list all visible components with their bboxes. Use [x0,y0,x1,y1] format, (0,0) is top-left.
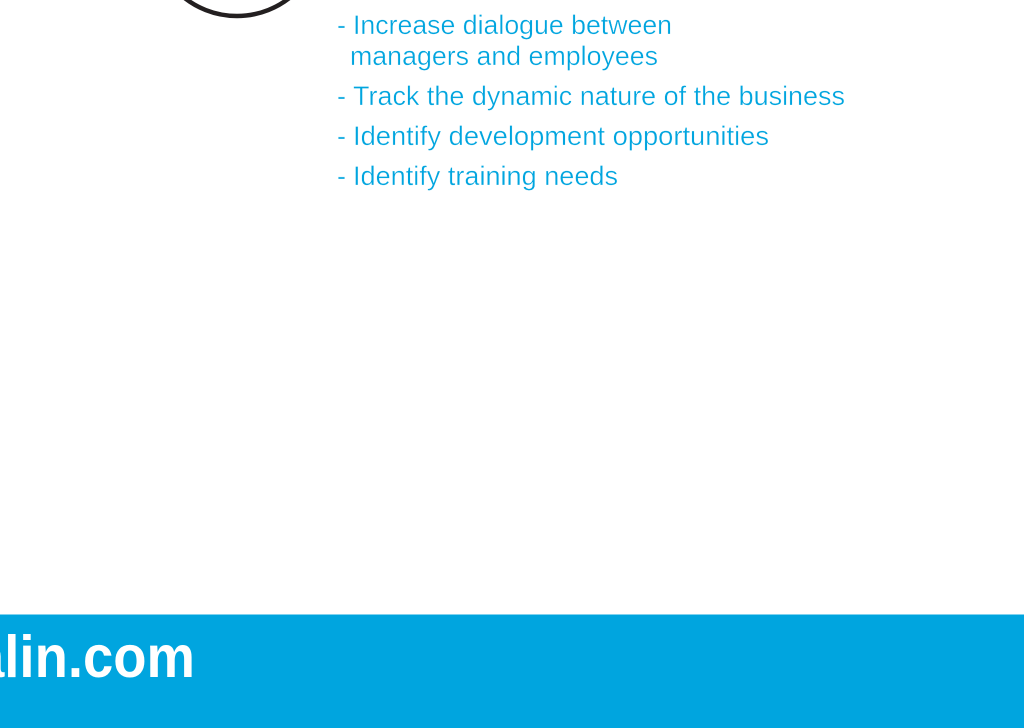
list item: development opportunities: - [337,121,346,151]
icon: circle outline cropped at top [152,0,322,16]
list item: development opportunities: Identify development opportunities [353,121,769,151]
list item: training needs: Identify training needs [353,161,618,191]
footer band [0,614,1024,728]
list item: track the business: Track the dynamic nature of the business [353,81,845,111]
list item: increase dialogue [337,10,672,71]
list item: increase dialogue: - [337,10,346,40]
benefits list [337,10,845,191]
list item: increase dialogue: Increase dialogue between [353,10,672,40]
list item: increase dialogue: managers and employees [350,41,658,71]
list item: track the business: - [337,81,346,111]
list item: training needs: - [337,161,346,191]
